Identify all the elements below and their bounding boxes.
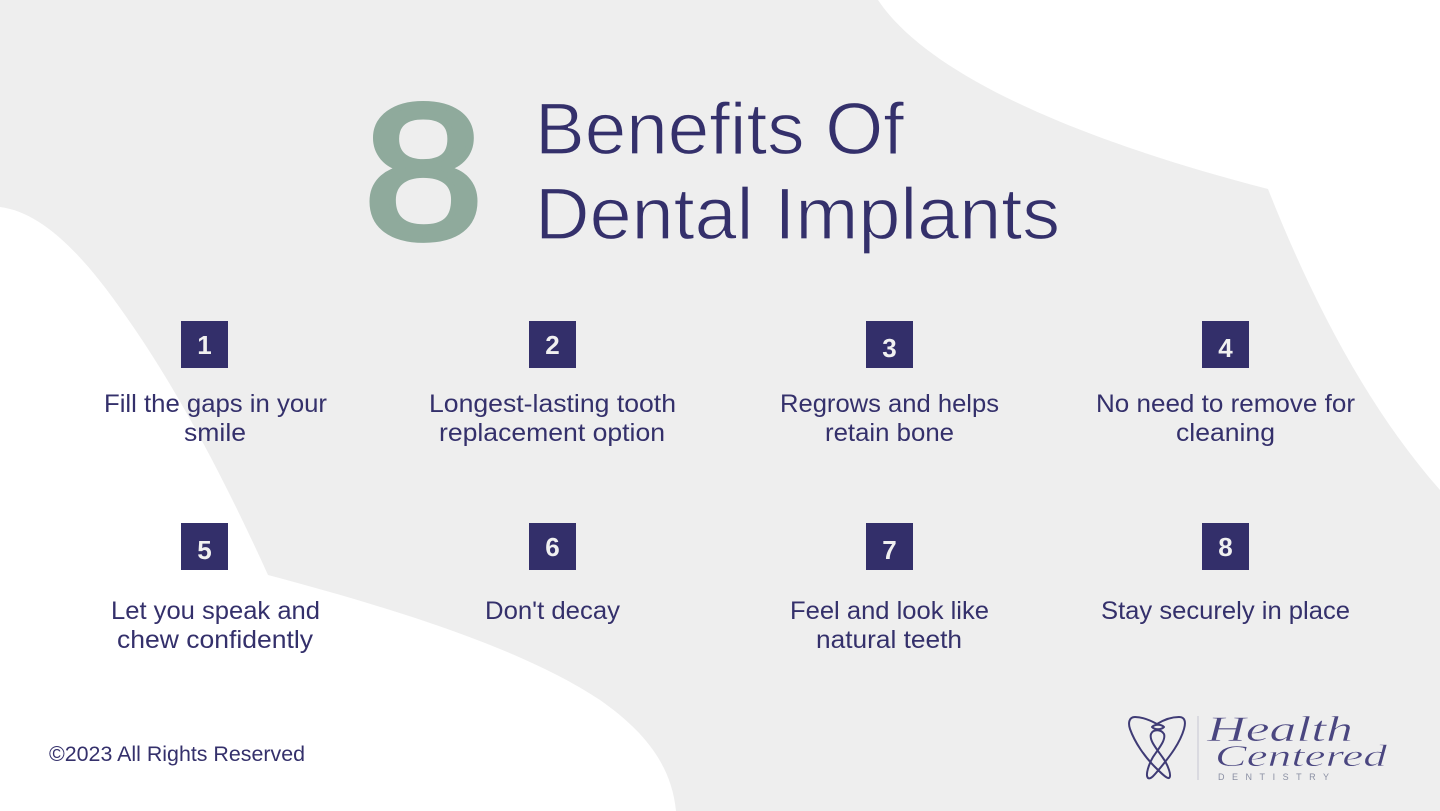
- heading number: 8: 8: [364, 64, 484, 279]
- copyright: ©2023 All Rights Reserved: [49, 743, 305, 766]
- benefit 4: cleaning: [1176, 419, 1275, 447]
- benefit 1: Fill the gaps in your: [104, 390, 327, 418]
- logo: Health Centered Dentistry: Centered: [1215, 738, 1388, 773]
- title: [535, 89, 1060, 255]
- benefit 3: [780, 321, 999, 447]
- benefit 7: Feel and look like: [790, 597, 989, 625]
- icon: tooth: [1129, 717, 1185, 778]
- title: Dental Implants: [535, 174, 1060, 255]
- benefit 3: 3: [882, 333, 897, 363]
- benefit 8: [1101, 523, 1350, 625]
- divider: [1198, 716, 1199, 780]
- benefit 4: [1096, 321, 1355, 447]
- benefit 4: No need to remove for: [1096, 390, 1355, 418]
- benefit 6: 6: [545, 532, 560, 562]
- benefit 6: [485, 523, 621, 625]
- benefit 1: smile: [184, 419, 246, 447]
- benefit 5: Let you speak and: [111, 597, 320, 625]
- benefit 7: [790, 523, 989, 654]
- benefit 1: [104, 321, 327, 447]
- benefit 2: [429, 321, 676, 447]
- benefit 3: retain bone: [825, 419, 954, 447]
- benefit 4: 4: [1218, 333, 1233, 363]
- benefit 7: natural teeth: [816, 626, 962, 654]
- benefit 8: 8: [1218, 532, 1233, 562]
- benefit 2: Longest-lasting tooth: [429, 390, 676, 418]
- benefit 8: Stay securely in place: [1101, 597, 1350, 625]
- benefit 3: Regrows and helps: [780, 390, 999, 418]
- logo: Health Centered Dentistry: [1129, 709, 1388, 782]
- wordmark: Health: [1206, 709, 1353, 749]
- benefit 5: [111, 523, 320, 654]
- benefit 2: replacement option: [439, 419, 665, 447]
- benefit 2: 2: [545, 330, 560, 360]
- benefit 5: 5: [197, 535, 212, 565]
- benefit 6: Don't decay: [485, 597, 621, 625]
- logo: Health Centered Dentistry: DENTISTRY: [1218, 772, 1329, 782]
- title: Benefits Of: [535, 89, 905, 170]
- benefit 7: 7: [882, 535, 897, 565]
- benefit 5: chew confidently: [117, 626, 314, 654]
- benefit 1: 1: [197, 330, 212, 360]
